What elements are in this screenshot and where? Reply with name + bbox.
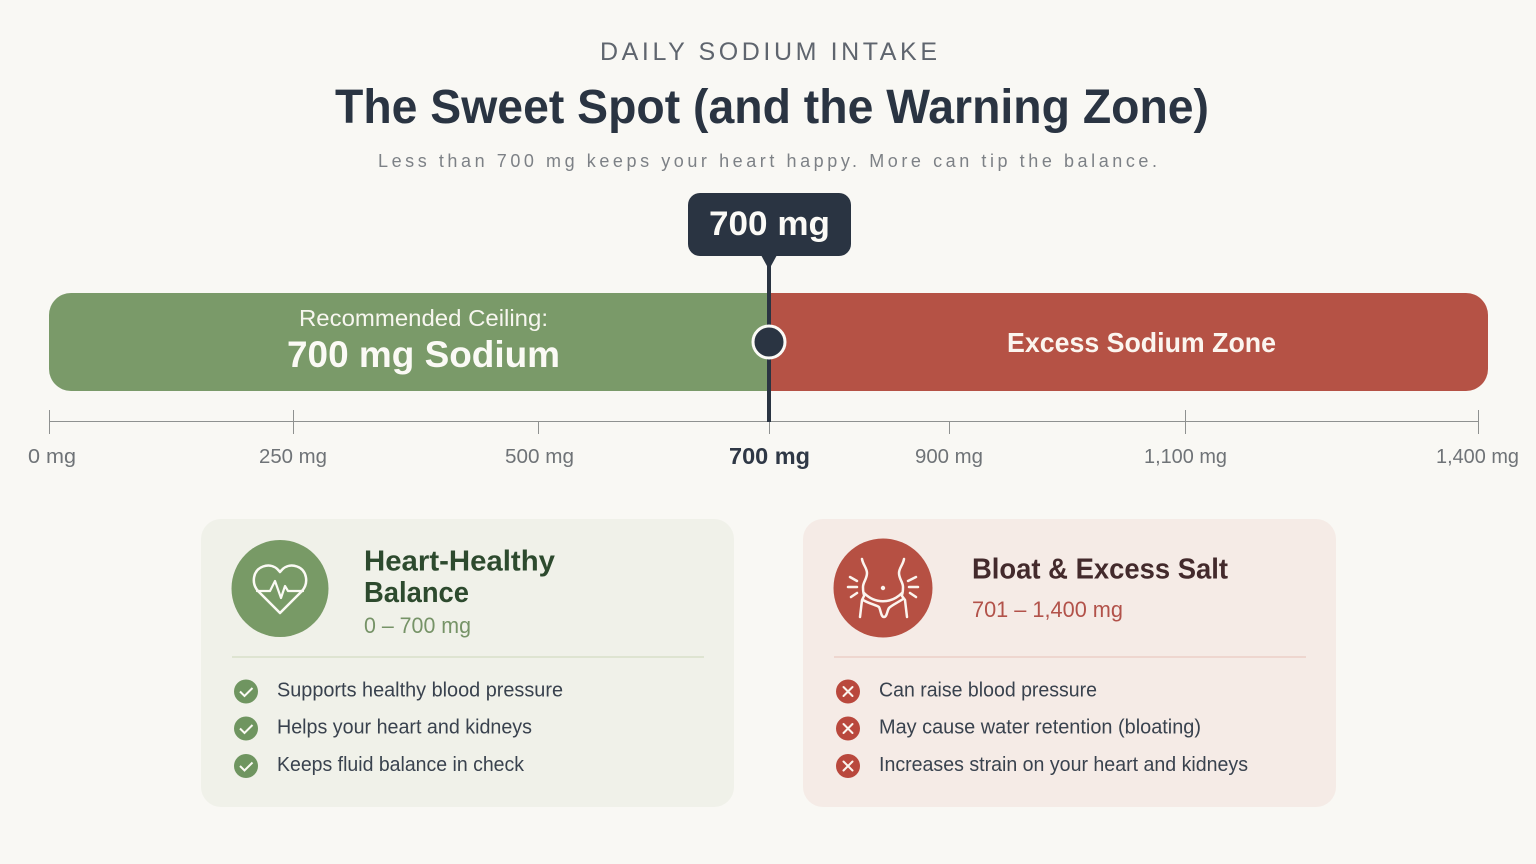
panel: heart-healthy balance: Balance [364,577,469,609]
700 mg marker callout [688,193,851,422]
heading: Heart-Healthy [364,546,555,578]
axis scale: 1,100 mg [1144,445,1227,468]
eyebrow heading: DAILY SODIUM INTAKE [600,38,937,66]
panel: bloat and excess salt [803,519,1336,807]
axis scale: 1,400 mg [1436,445,1519,468]
red excess zone [769,293,1488,391]
benefits list [234,678,563,778]
risks list [836,678,1248,778]
subtitle: Less than 700 mg keeps your heart happy. More can tip the balance. [378,151,1157,171]
axis scale: 700 mg [729,443,810,469]
range label: 0 – 700 mg [364,613,471,638]
sodium range bar [49,293,1488,391]
risks list: May cause water retention (bloating) [879,716,1201,738]
range label: 701 – 1,400 mg [972,597,1123,622]
icon: bloated belly [834,538,932,638]
axis scale: 900 mg [915,445,983,468]
axis scale: 250 mg [259,445,327,468]
risks list: Increases strain on your heart and kidneys [879,753,1248,776]
benefits list: Supports healthy blood pressure [277,678,563,702]
green safe zone: 700 mg Sodium [287,334,560,375]
panel: heart-healthy balance [201,519,734,807]
green safe zone [49,293,769,391]
green safe zone: Recommended Ceiling: [299,305,548,331]
red excess zone: Excess Sodium Zone [1007,327,1276,358]
risks list: Can raise blood pressure [879,678,1097,702]
axis scale: 500 mg [505,445,574,468]
title: The Sweet Spot (and the Warning Zone) [335,81,1209,134]
axis scale [28,410,1519,469]
benefits list: Helps your heart and kidneys [277,716,532,738]
icon: heart with pulse [232,540,328,637]
axis scale: 0 mg [28,445,76,468]
benefits list: Keeps fluid balance in check [277,753,525,776]
700 mg marker callout: 700 mg [709,205,830,243]
heading: Bloat & Excess Salt [972,554,1228,586]
